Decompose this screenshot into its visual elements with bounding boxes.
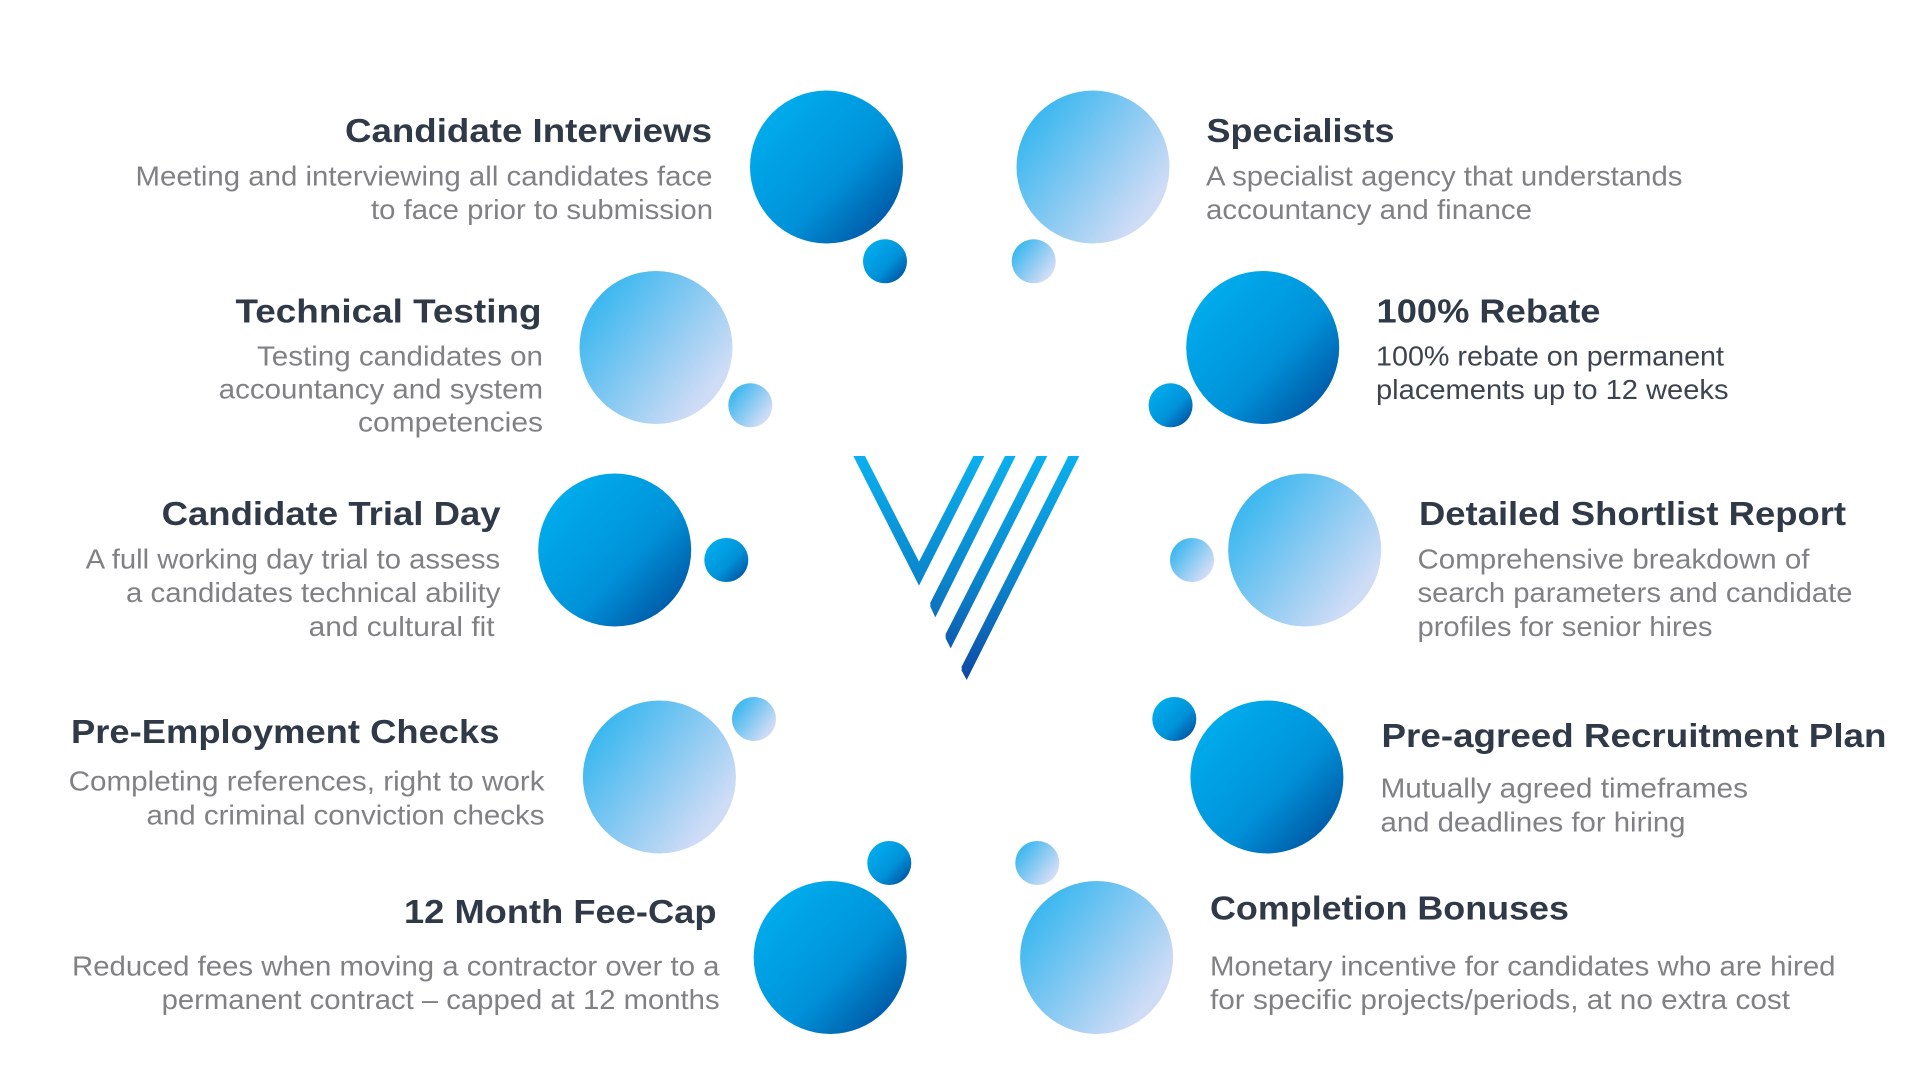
description: Candidate Trial Day bbox=[86, 543, 501, 642]
panel: Pre-agreed Recruitment Plan bbox=[1152, 697, 1886, 854]
heading: 12 Month Fee-Cap: 12 Month Fee-Cap bbox=[404, 894, 716, 931]
description: Pre-Employment Checks bbox=[69, 765, 545, 830]
description: 12 Month Fee-Cap bbox=[72, 950, 720, 1015]
description: Pre-agreed Recruitment Plan bbox=[1380, 772, 1748, 837]
description: 100% Rebate: placements up to 12 weeks bbox=[1376, 374, 1728, 405]
description: Pre-Employment Checks: Completing references, right to work bbox=[69, 765, 545, 796]
icon: bubble pair, light bbox=[1012, 90, 1170, 283]
heading: Technical Testing: Technical Testing bbox=[236, 294, 542, 330]
description: 100% Rebate bbox=[1376, 340, 1728, 405]
heading: Pre-agreed Recruitment Plan: Pre-agreed Recruitment Plan bbox=[1382, 718, 1886, 755]
description: Technical Testing: Testing candidates on bbox=[257, 340, 543, 371]
description: Technical Testing: competencies bbox=[358, 406, 543, 437]
panel: Completion Bonuses bbox=[1015, 841, 1836, 1034]
description: Specialists: A specialist agency that understands bbox=[1206, 160, 1682, 191]
description: Completion Bonuses: for specific projects/periods, at no extra cost bbox=[1210, 984, 1790, 1015]
panel: Technical Testing bbox=[219, 271, 772, 437]
description: Completion Bonuses bbox=[1210, 950, 1836, 1015]
icon: bubble pair, dark bbox=[1152, 697, 1343, 854]
description: Detailed Shortlist Report: search parameters and candidate bbox=[1418, 577, 1852, 608]
panel: Candidate Interviews bbox=[136, 90, 907, 283]
description: Specialists bbox=[1206, 160, 1682, 225]
description: Specialists: accountancy and finance bbox=[1206, 194, 1532, 225]
description: 12 Month Fee-Cap: Reduced fees when moving a contractor over to a bbox=[72, 950, 720, 981]
heading: Specialists: Specialists bbox=[1206, 113, 1394, 150]
description: Detailed Shortlist Report bbox=[1418, 543, 1852, 642]
heading: Candidate Trial Day: Candidate Trial Day bbox=[162, 496, 501, 533]
description: Candidate Trial Day: A full working day trial to assess bbox=[86, 543, 500, 574]
description: Technical Testing bbox=[219, 340, 543, 437]
description: Candidate Trial Day: a candidates technical ability bbox=[126, 577, 501, 608]
description: Technical Testing: accountancy and system bbox=[219, 373, 543, 404]
logo: striped V mark bbox=[853, 456, 1079, 680]
description: Candidate Interviews: to face prior to submission bbox=[371, 194, 713, 225]
icon: bubble pair, light bbox=[1015, 841, 1173, 1034]
panel: Detailed Shortlist Report bbox=[1170, 474, 1852, 642]
description: Pre-agreed Recruitment Plan: Mutually agreed timeframes bbox=[1380, 772, 1748, 803]
panel: Pre-Employment Checks bbox=[69, 697, 776, 854]
panel: Candidate Trial Day bbox=[86, 474, 748, 642]
icon: bubble pair, light bbox=[583, 697, 776, 854]
description: Completion Bonuses: Monetary incentive for candidates who are hired bbox=[1210, 950, 1836, 981]
panel: 12 Month Fee-Cap bbox=[72, 841, 911, 1034]
heading: Detailed Shortlist Report: Detailed Shortlist Report bbox=[1419, 496, 1846, 533]
description: 100% Rebate: 100% rebate on permanent bbox=[1376, 340, 1724, 371]
description: Candidate Trial Day: and cultural fit bbox=[309, 611, 495, 642]
description: Pre-Employment Checks: and criminal conviction checks bbox=[146, 799, 544, 830]
icon: bubble pair, dark bbox=[750, 90, 907, 283]
icon: bubble pair, dark bbox=[538, 474, 748, 626]
heading: Completion Bonuses: Completion Bonuses bbox=[1210, 890, 1569, 928]
description: Pre-agreed Recruitment Plan: and deadlines for hiring bbox=[1380, 806, 1686, 837]
icon: bubble pair, dark bbox=[754, 841, 911, 1034]
description: 12 Month Fee-Cap: permanent contract – capped at 12 months bbox=[162, 984, 720, 1015]
heading: 100% Rebate: 100% Rebate bbox=[1376, 294, 1600, 330]
description: Candidate Interviews: Meeting and interviewing all candidates face bbox=[136, 160, 712, 191]
panel: Specialists bbox=[1012, 90, 1682, 283]
description: Candidate Interviews bbox=[136, 160, 713, 225]
description: Detailed Shortlist Report: profiles for senior hires bbox=[1418, 611, 1712, 642]
heading: Candidate Interviews: Candidate Interviews bbox=[345, 113, 712, 150]
icon: bubble pair, light bbox=[580, 271, 772, 427]
panel: 100% Rebate bbox=[1149, 271, 1728, 427]
icon: bubble pair, dark bbox=[1149, 271, 1339, 427]
icon: bubble pair, light bbox=[1170, 474, 1381, 626]
heading: Pre-Employment Checks: Pre-Employment Checks bbox=[71, 714, 499, 751]
description: Detailed Shortlist Report: Comprehensive breakdown of bbox=[1418, 543, 1810, 574]
